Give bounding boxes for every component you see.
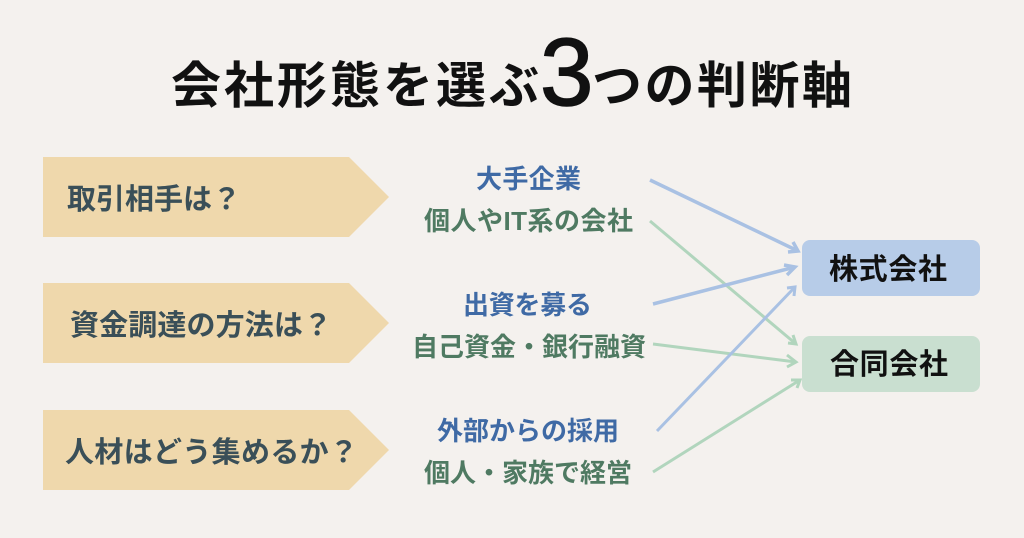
- arrow: 個人やIT系の会社 to 合同会社: [650, 221, 796, 344]
- arrow: 出資を募る to 株式会社: [653, 265, 795, 304]
- title: つの判断軸: [592, 58, 852, 114]
- option: 出資を募る: 出資を募る: [463, 290, 592, 320]
- panel: question 3: [43, 410, 389, 490]
- option: 大手企業: 大手企業: [476, 164, 581, 194]
- result: 合同会社: [802, 336, 980, 392]
- option: 外部からの採用: 外部からの採用: [437, 416, 619, 446]
- option: 個人・家族で経営: 個人・家族で経営: [424, 458, 632, 488]
- arrow: 自己資金・銀行融資 to 合同会社: [653, 344, 796, 367]
- panel: question 1: [43, 157, 389, 237]
- result: 株式会社: 株式会社: [829, 253, 947, 286]
- arrow: 外部からの採用 to 株式会社: [657, 287, 795, 431]
- arrow: 大手企業 to 株式会社: [650, 180, 798, 252]
- panel: question 2: [43, 283, 389, 363]
- result: 株式会社: [802, 240, 980, 296]
- panel: question 3: 人材はどう集めるか？: [65, 436, 358, 469]
- result: 合同会社: 合同会社: [830, 348, 948, 381]
- title: [171, 19, 852, 126]
- panel: question 1: 取引相手は？: [67, 183, 241, 216]
- title: 会社形態を選ぶ: [171, 58, 539, 114]
- arrow: 個人・家族で経営 to 合同会社: [653, 380, 800, 472]
- option: 自己資金・銀行融資: 自己資金・銀行融資: [412, 332, 646, 362]
- title: 3: [540, 19, 593, 126]
- option: 個人やIT系の会社: 個人やIT系の会社: [424, 206, 633, 236]
- panel: question 2: 資金調達の方法は？: [70, 309, 332, 342]
